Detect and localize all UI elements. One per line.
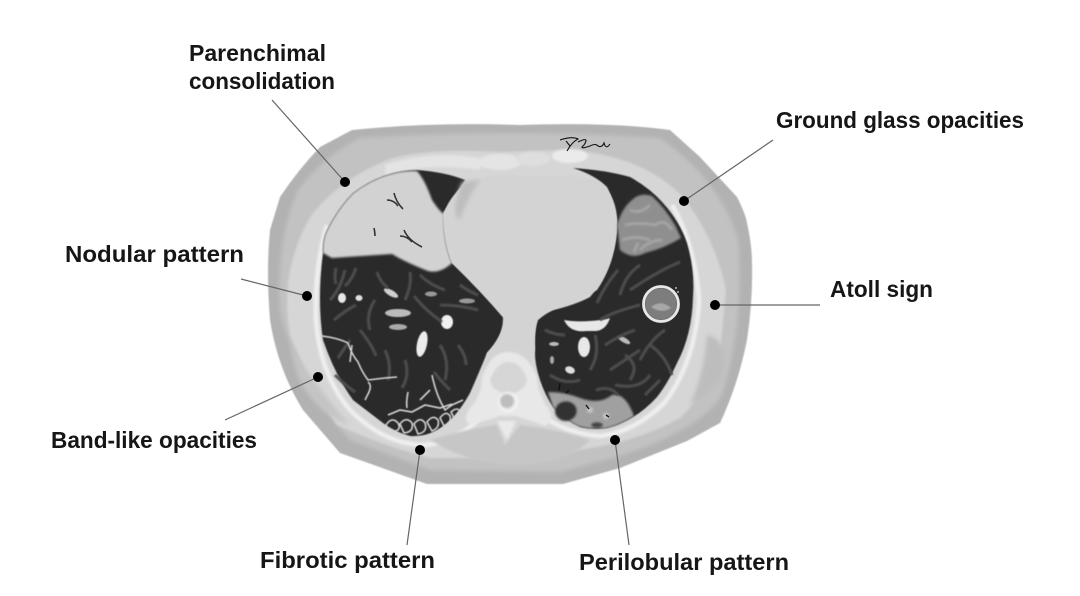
callout: Band-like opacities xyxy=(51,372,323,453)
callout: Parenchymal consolidation: consolidation xyxy=(189,68,335,94)
bright pleural rib ring, image left xyxy=(316,225,478,445)
subcutaneous fat band xyxy=(279,133,740,472)
callout: Nodular pattern xyxy=(65,241,312,301)
body outline xyxy=(268,124,752,484)
vessels, image left lung xyxy=(338,286,475,358)
perilobular pattern xyxy=(548,392,634,429)
vessels, image right lung xyxy=(549,318,631,375)
callout: Nodular pattern: Nodular pattern xyxy=(65,241,244,267)
fibrotic honeycombing xyxy=(386,375,463,434)
spine xyxy=(430,352,590,465)
lung parenchyma swirls, image right xyxy=(545,262,680,395)
ground glass opacities xyxy=(617,195,681,256)
callout: Atoll sign: Atoll sign xyxy=(830,276,933,302)
small arrows in perilobular area xyxy=(559,383,609,417)
pericardial shade xyxy=(455,180,480,220)
heart and mediastinum xyxy=(444,175,617,372)
CT scan image xyxy=(268,124,752,484)
signature xyxy=(560,138,610,151)
lung, image right xyxy=(535,168,693,429)
lateral muscle patch, left of image xyxy=(292,345,350,425)
callout: Atoll sign xyxy=(710,276,933,310)
callout: Fibrotic pattern xyxy=(260,445,435,573)
consolidation xyxy=(323,171,452,272)
chest wall muscle ring xyxy=(287,150,726,458)
callout: Ground glass opacities: Ground glass opacities xyxy=(776,107,1024,133)
lung parenchyma swirls, image left xyxy=(330,268,478,392)
bright pleural rib ring, image right xyxy=(545,205,699,436)
lung, image left xyxy=(320,170,503,436)
lateral muscle patch, right of image xyxy=(690,335,724,405)
callout: Band-like opacities: Band-like opacities xyxy=(51,427,257,453)
band-like opacities xyxy=(322,336,397,400)
callout: Perilobular pattern: Perilobular pattern xyxy=(579,549,789,575)
callout: Ground glass opacities xyxy=(679,107,1024,206)
callout: Parenchymal consolidation xyxy=(189,40,350,187)
air bronchograms xyxy=(374,193,422,247)
callout: Perilobular pattern xyxy=(579,435,789,575)
atoll sign xyxy=(644,286,679,322)
callout: Fibrotic pattern: Fibrotic pattern xyxy=(260,547,435,573)
callout: Parenchymal consolidation: Parenchimal xyxy=(189,40,326,66)
sternum xyxy=(385,149,588,175)
